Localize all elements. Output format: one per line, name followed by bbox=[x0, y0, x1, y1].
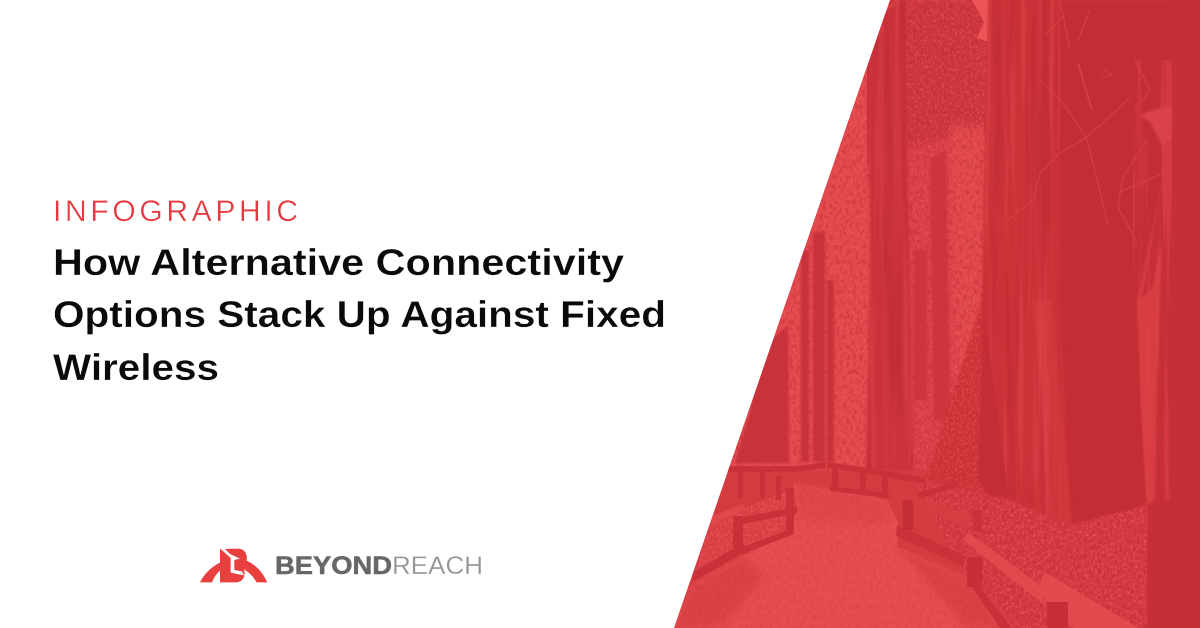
fence: left light rail bbox=[712, 504, 745, 524]
hanging moss bbox=[1142, 108, 1171, 144]
flare of big trunk bbox=[925, 290, 985, 495]
path lower-left shade bbox=[674, 562, 760, 628]
path texture bbox=[674, 483, 1014, 628]
secondary trunks bbox=[914, 150, 950, 420]
right foreground trunk bbox=[1140, 0, 1200, 628]
right trunk lit streak bbox=[1140, 248, 1162, 504]
left verge bbox=[690, 490, 795, 587]
fence: left side bbox=[693, 462, 826, 582]
treetop foliage bbox=[895, 0, 989, 150]
big trunk lit bark bbox=[988, 1, 989, 36]
foliage texture bbox=[728, 0, 987, 470]
far-left light opening bbox=[728, 70, 870, 470]
bark highlight bbox=[1032, 300, 1072, 530]
logo wordmark: BEYOND bbox=[275, 552, 392, 580]
undergrowth bbox=[990, 496, 1146, 626]
heading: Options Stack Up Against Fixed bbox=[53, 294, 666, 335]
logo: Beyond Reach: REACH bbox=[392, 552, 483, 580]
bark textures bbox=[860, 0, 1180, 540]
path right shade bbox=[910, 557, 998, 626]
light patch beside big trunk bbox=[950, 124, 982, 364]
path top shade bbox=[793, 483, 892, 525]
branches bbox=[1008, 0, 1167, 243]
heading bbox=[53, 242, 666, 388]
fence: right side bbox=[891, 488, 1138, 628]
sky gap bbox=[972, 0, 989, 42]
heading: Wireless bbox=[53, 347, 219, 388]
forest base bbox=[670, 0, 1200, 628]
logo: Beyond Reach bbox=[200, 548, 483, 582]
far-left dark trees bbox=[735, 232, 834, 463]
middle dark trunk bbox=[866, 0, 913, 470]
label: INFOGRAPHIC: INFOGRAPHIC bbox=[53, 195, 298, 228]
light foliage behind trunks bbox=[912, 146, 946, 460]
forest path bbox=[674, 483, 1013, 628]
fence: far rails bbox=[827, 462, 958, 499]
photo panel: red-tinted redwood forest bbox=[670, 0, 1200, 628]
heading: How Alternative Connectivity bbox=[53, 242, 624, 283]
big redwood trunk bbox=[978, 0, 1172, 532]
logo icon bbox=[200, 548, 267, 582]
